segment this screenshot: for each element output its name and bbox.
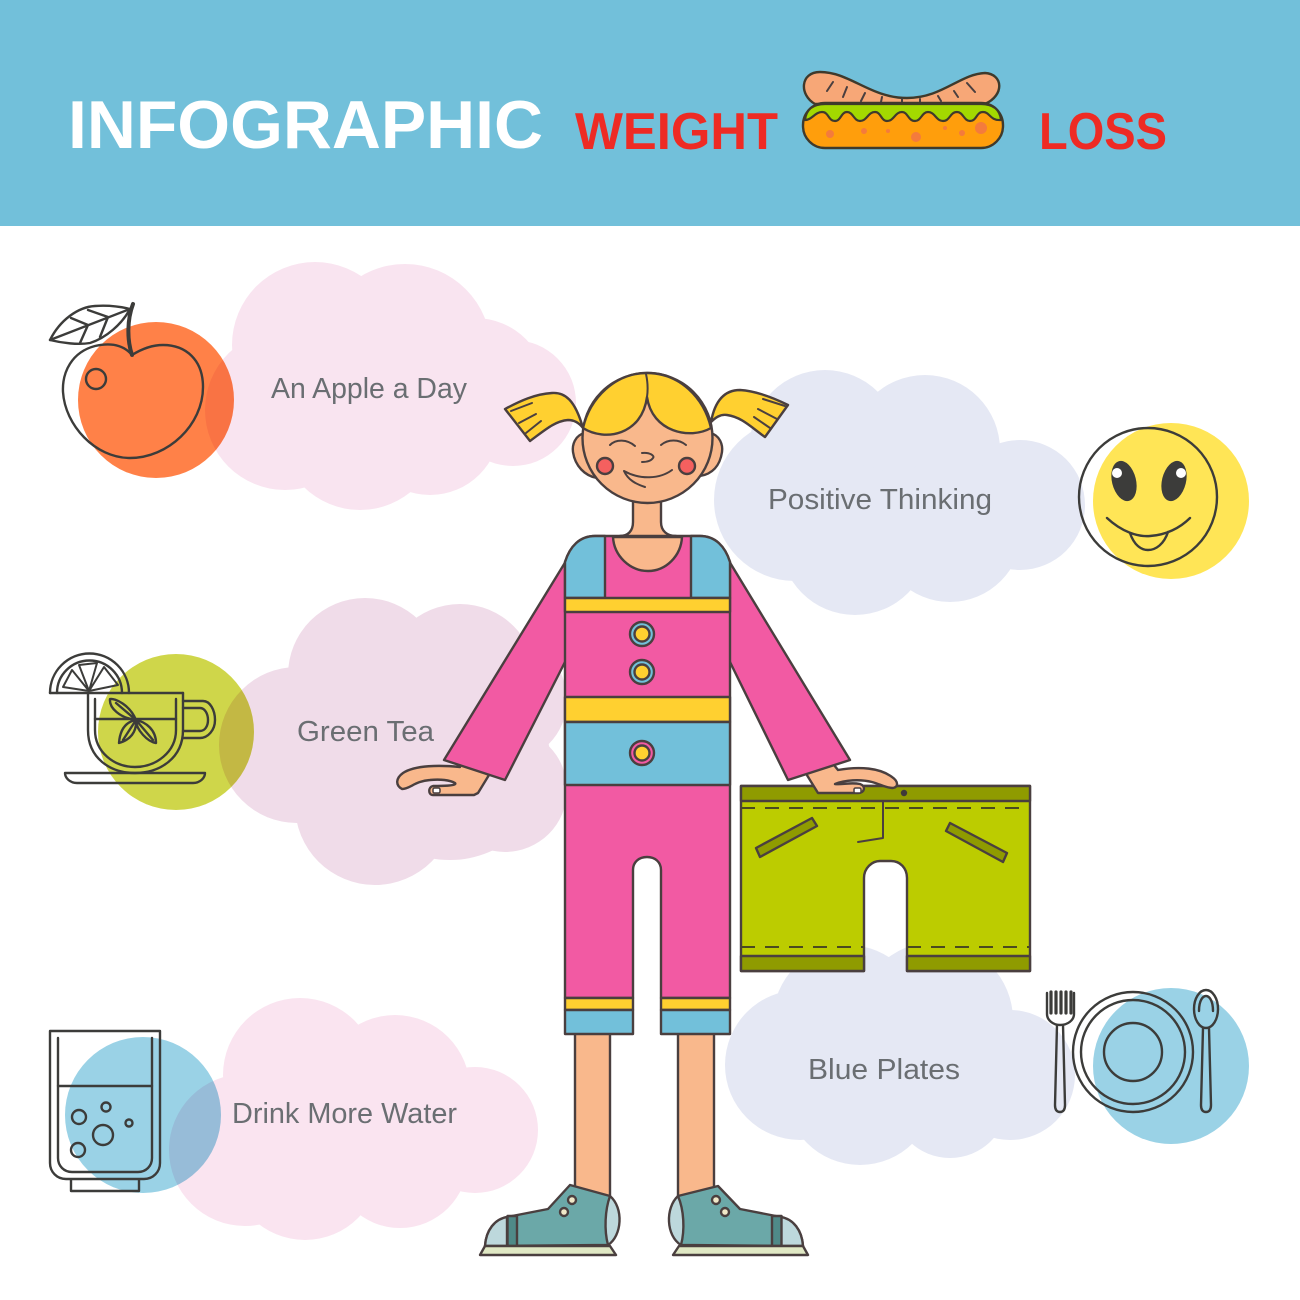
left leg <box>575 1030 610 1200</box>
hair fringe <box>583 373 711 435</box>
color circle: plate <box>1093 988 1249 1144</box>
cloud: apple <box>205 262 576 510</box>
left sleeve <box>444 561 566 780</box>
panel: drink more water <box>50 998 538 1240</box>
panel: blue plates <box>725 942 1249 1165</box>
panel: green tea <box>50 598 567 885</box>
shorts hem right <box>907 956 1030 971</box>
ears <box>573 433 722 478</box>
icon: hot dog <box>803 72 1003 148</box>
buttons <box>630 622 654 765</box>
chest band <box>565 598 730 612</box>
label: positive thinking: Positive Thinking <box>768 484 992 516</box>
head <box>582 373 712 503</box>
title: weight: WEIGHT <box>575 103 778 161</box>
title: loss: LOSS <box>1039 103 1167 161</box>
shorts hem left <box>741 956 864 971</box>
icon: plate and cutlery <box>1047 990 1218 1112</box>
icon: smiley <box>1079 428 1217 566</box>
shorts button <box>901 790 907 796</box>
label: an apple a day: An Apple a Day <box>271 373 467 405</box>
pigtail left <box>505 393 583 441</box>
icon: tea cup with lemon <box>50 654 215 783</box>
icon: apple <box>50 304 203 458</box>
icon: glass of water <box>50 1031 160 1191</box>
belly band <box>565 722 730 785</box>
color circle: smile <box>1093 423 1249 579</box>
cloud: green tea <box>219 598 567 885</box>
left hand <box>397 760 489 795</box>
title: infographic: INFOGRAPHIC <box>68 87 543 163</box>
right strap <box>691 536 730 598</box>
pigtail right <box>711 390 788 437</box>
label: blue plates: Blue Plates <box>808 1054 960 1086</box>
color circle: apple <box>78 322 234 478</box>
right shoe <box>669 1186 808 1255</box>
right leg <box>678 1030 714 1200</box>
label: green tea: Green Tea <box>297 716 435 748</box>
shorts waistband <box>741 786 1030 801</box>
cloud: drink more water <box>169 998 538 1240</box>
shorts pockets <box>756 818 1007 862</box>
label: drink more water: Drink More Water <box>232 1098 457 1130</box>
cloud: positive thinking <box>714 370 1085 615</box>
color circle: water <box>65 1037 221 1193</box>
waist band <box>565 697 730 722</box>
right sleeve <box>729 561 850 780</box>
panel: an apple a day <box>50 262 576 510</box>
right cuff <box>661 998 730 1034</box>
cheeks <box>597 458 695 474</box>
panel: positive thinking <box>714 370 1249 615</box>
left shoe <box>480 1185 620 1255</box>
shorts fly <box>858 801 883 842</box>
neckline <box>613 537 682 571</box>
overalls body <box>565 536 730 998</box>
shorts stitching <box>741 808 1030 947</box>
color circle: green tea <box>98 654 254 810</box>
left strap <box>565 536 605 598</box>
left cuff <box>565 998 633 1034</box>
face lines <box>610 440 686 487</box>
cloud: blue plates <box>725 942 1075 1165</box>
shorts <box>741 786 1030 971</box>
neck <box>620 500 676 545</box>
header banner <box>0 0 1300 226</box>
girl figure <box>397 373 897 1255</box>
right hand <box>805 760 897 793</box>
